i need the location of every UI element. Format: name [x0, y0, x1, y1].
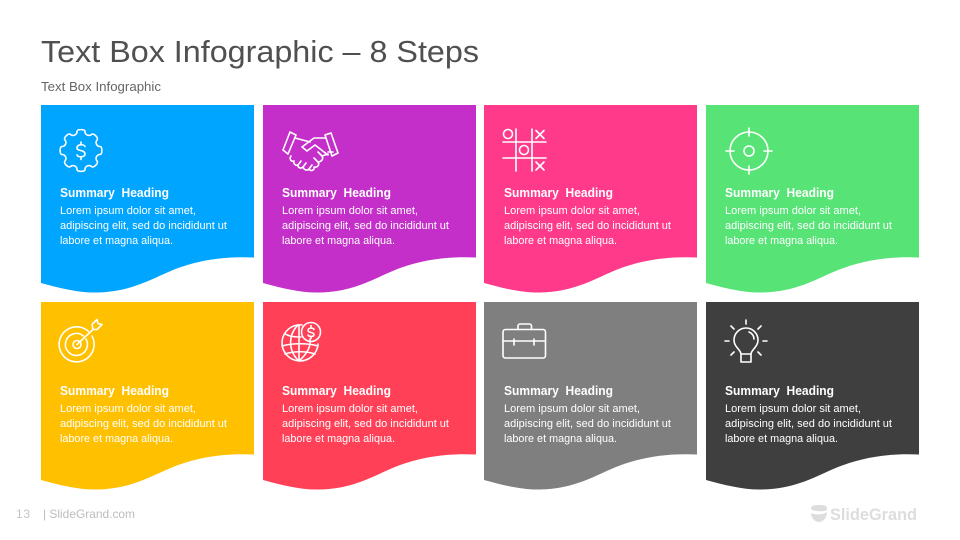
body text: Lorem ipsum dolor sit amet, — [282, 205, 418, 217]
icon: gear with dollar — [60, 130, 102, 171]
body text: adipiscing elit, sed do incididunt ut — [60, 220, 227, 232]
body text: labore et magna aliqua. — [282, 433, 395, 445]
body text: adipiscing elit, sed do incididunt ut — [725, 220, 892, 232]
icon: target with arrow — [59, 320, 102, 362]
panel: step 8 dark — [706, 302, 919, 490]
body text: Lorem ipsum dolor sit amet, — [504, 403, 640, 415]
title: Text Box Infographic – 8 Steps — [41, 34, 479, 69]
body text — [725, 205, 892, 247]
body text: labore et magna aliqua. — [504, 235, 617, 247]
body text: adipiscing elit, sed do incididunt ut — [504, 220, 671, 232]
panel: step 1 blue — [41, 105, 254, 293]
heading: Summary Heading — [504, 186, 613, 200]
body text: Lorem ipsum dolor sit amet, — [725, 403, 861, 415]
body text: labore et magna aliqua. — [725, 433, 838, 445]
icon: globe with dollar — [282, 322, 320, 361]
icon: handshake — [283, 132, 338, 170]
body text: labore et magna aliqua. — [282, 235, 395, 247]
body text: labore et magna aliqua. — [60, 433, 173, 445]
body text: adipiscing elit, sed do incididunt ut — [282, 220, 449, 232]
body text — [60, 403, 227, 445]
heading: Summary Heading — [725, 384, 834, 398]
body text — [504, 205, 671, 247]
body text: Lorem ipsum dolor sit amet, — [504, 205, 640, 217]
body text — [725, 403, 892, 445]
logo: SlideGrand: SlideGrand — [830, 506, 917, 524]
body text — [282, 205, 449, 247]
heading: Summary Heading — [725, 186, 834, 200]
body text: labore et magna aliqua. — [725, 235, 838, 247]
body text: adipiscing elit, sed do incididunt ut — [504, 418, 671, 430]
body text — [60, 205, 227, 247]
body text: labore et magna aliqua. — [60, 235, 173, 247]
body text: labore et magna aliqua. — [504, 433, 617, 445]
body text: Lorem ipsum dolor sit amet, — [60, 403, 196, 415]
panel: step 4 green — [706, 105, 919, 293]
heading: Summary Heading — [282, 384, 391, 398]
panel: step 2 purple — [263, 105, 476, 293]
icon: tic tac toe — [503, 129, 546, 171]
heading: Summary Heading — [60, 384, 169, 398]
body text: adipiscing elit, sed do incididunt ut — [725, 418, 892, 430]
heading: Summary Heading — [60, 186, 169, 200]
panel: step 7 gray — [484, 302, 697, 490]
footer source: | SlideGrand.com — [43, 507, 135, 521]
icon: light bulb — [725, 320, 767, 362]
body text — [282, 403, 449, 445]
heading: Summary Heading — [504, 384, 613, 398]
body text: Lorem ipsum dolor sit amet, — [282, 403, 418, 415]
body text — [504, 403, 671, 445]
panel: step 3 pink — [484, 105, 697, 293]
heading: Summary Heading — [282, 186, 391, 200]
body text: Lorem ipsum dolor sit amet, — [725, 205, 861, 217]
icon: briefcase — [503, 324, 546, 358]
body text: adipiscing elit, sed do incididunt ut — [282, 418, 449, 430]
body text: adipiscing elit, sed do incididunt ut — [60, 418, 227, 430]
body text: Lorem ipsum dolor sit amet, — [60, 205, 196, 217]
icon: crosshair — [726, 128, 772, 174]
panel: step 5 yellow — [41, 302, 254, 490]
page number: 13 — [16, 507, 30, 521]
subtitle: Text Box Infographic — [41, 80, 161, 94]
panel: step 6 red — [263, 302, 476, 490]
